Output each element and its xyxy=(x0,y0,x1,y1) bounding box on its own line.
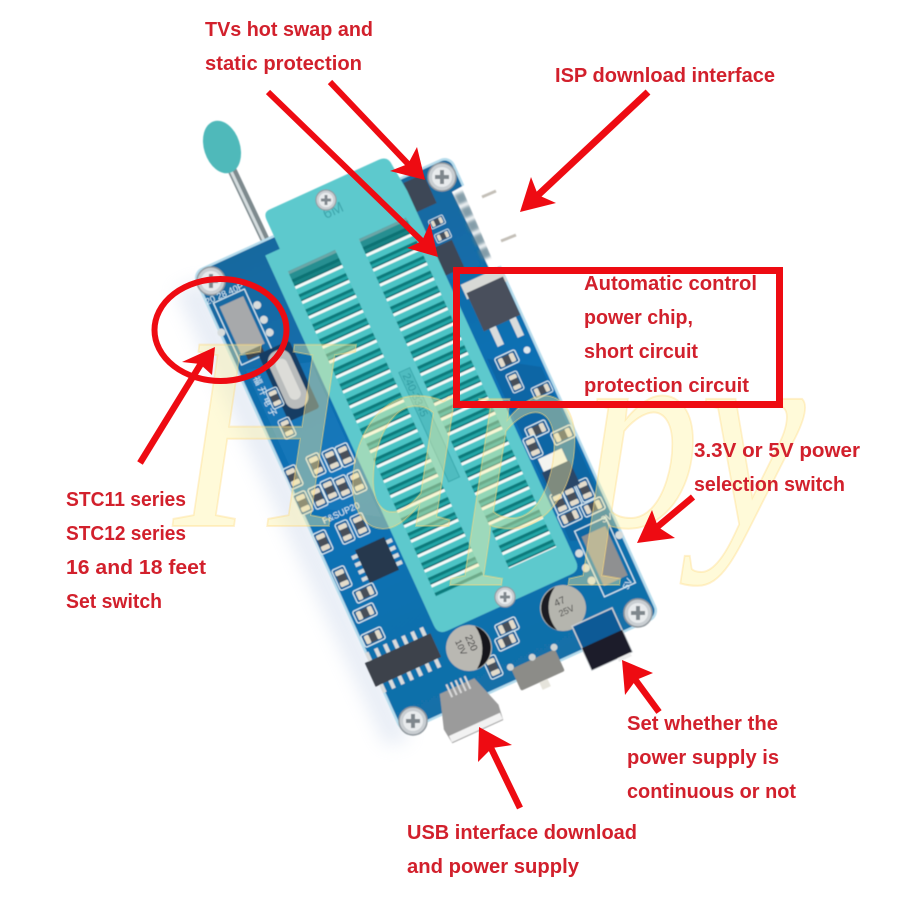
label: continuous power: power supply is xyxy=(627,746,779,769)
arrow: ISP interface xyxy=(520,92,648,212)
right surface mount components xyxy=(483,346,606,680)
capacitor 47uF: 25V xyxy=(557,603,576,619)
pin selector markings: 20 28 40P xyxy=(204,281,245,307)
power jack switch xyxy=(572,608,634,674)
left surface mount components xyxy=(266,387,386,648)
label: automatic control: protection circuit xyxy=(584,374,749,397)
capacitor 220uF: 10V xyxy=(453,638,469,657)
socket handle lever xyxy=(197,116,269,248)
capacitor 220uF: 220 xyxy=(462,633,479,653)
crystal xyxy=(258,340,320,422)
socket model text: 240-3345 xyxy=(400,372,430,419)
label: automatic control xyxy=(584,272,757,397)
circle highlight: set switch xyxy=(154,279,286,381)
left set switch xyxy=(205,285,281,369)
slide power switch xyxy=(506,643,571,700)
label: continuous power: continuous or not xyxy=(627,780,796,803)
label: STC set switch: STC11 series xyxy=(66,488,186,511)
voltage markings: 5V xyxy=(621,577,634,591)
label: TVs protection: TVs hot swap and xyxy=(205,18,373,41)
small regulator xyxy=(536,448,580,496)
micro USB socket xyxy=(427,668,505,744)
arrow: power continuity switch xyxy=(622,660,659,712)
label: TVs protection: static protection xyxy=(205,52,362,75)
programmer board photo xyxy=(193,116,659,744)
capacitor 47uF xyxy=(540,585,586,631)
printed circuit board xyxy=(193,156,659,733)
TVS chips xyxy=(403,174,464,276)
right voltage switch xyxy=(566,513,644,601)
label: USB interface: USB interface download xyxy=(407,821,637,844)
board shadow xyxy=(175,280,410,745)
label: STC set switch: STC12 series xyxy=(66,522,186,545)
label: STC set switch: 16 and 18 feet xyxy=(66,556,206,579)
board marking: F&SUP20 xyxy=(321,500,361,526)
arrow: voltage switch xyxy=(637,497,693,543)
label: power selection: selection switch xyxy=(694,473,845,496)
arrow: static protection to chip xyxy=(268,92,438,257)
label: power selection: 3.3V or 5V power xyxy=(694,439,860,462)
label: STC set switch xyxy=(66,488,206,613)
ZIF socket xyxy=(249,154,580,635)
capacitor 220uF xyxy=(446,625,492,671)
voltage markings: 3V xyxy=(600,511,614,525)
arrow: set switch xyxy=(140,347,215,463)
programmer IC xyxy=(361,625,445,695)
label: power selection xyxy=(694,439,860,496)
white ISP connector xyxy=(452,172,530,270)
label: USB interface: and power supply xyxy=(407,855,580,878)
label: continuous power: Set whether the xyxy=(627,712,778,735)
small IC xyxy=(350,534,404,586)
arrow: TVs to chip xyxy=(330,82,425,180)
label: automatic control: short circuit xyxy=(584,340,698,363)
callout box: power chip xyxy=(456,270,780,404)
label: automatic control: power chip, xyxy=(584,306,693,329)
capacitor 47uF: 47 xyxy=(553,595,568,610)
socket top text: 6M xyxy=(320,199,346,223)
label: TVs protection xyxy=(205,18,373,75)
label: STC set switch: Set switch xyxy=(66,590,162,613)
label: automatic control: Automatic control xyxy=(584,272,757,295)
label: ISP download: ISP download interface xyxy=(555,64,775,87)
arrow: USB interface xyxy=(478,727,520,808)
watermark: Happy: Happy xyxy=(171,279,807,587)
label: USB interface xyxy=(407,821,637,878)
voltage markings xyxy=(600,511,634,591)
company marking: 福 开 电 子 xyxy=(251,374,280,418)
label: continuous power xyxy=(627,712,796,803)
screws xyxy=(197,163,652,735)
power regulator chip xyxy=(461,267,530,350)
